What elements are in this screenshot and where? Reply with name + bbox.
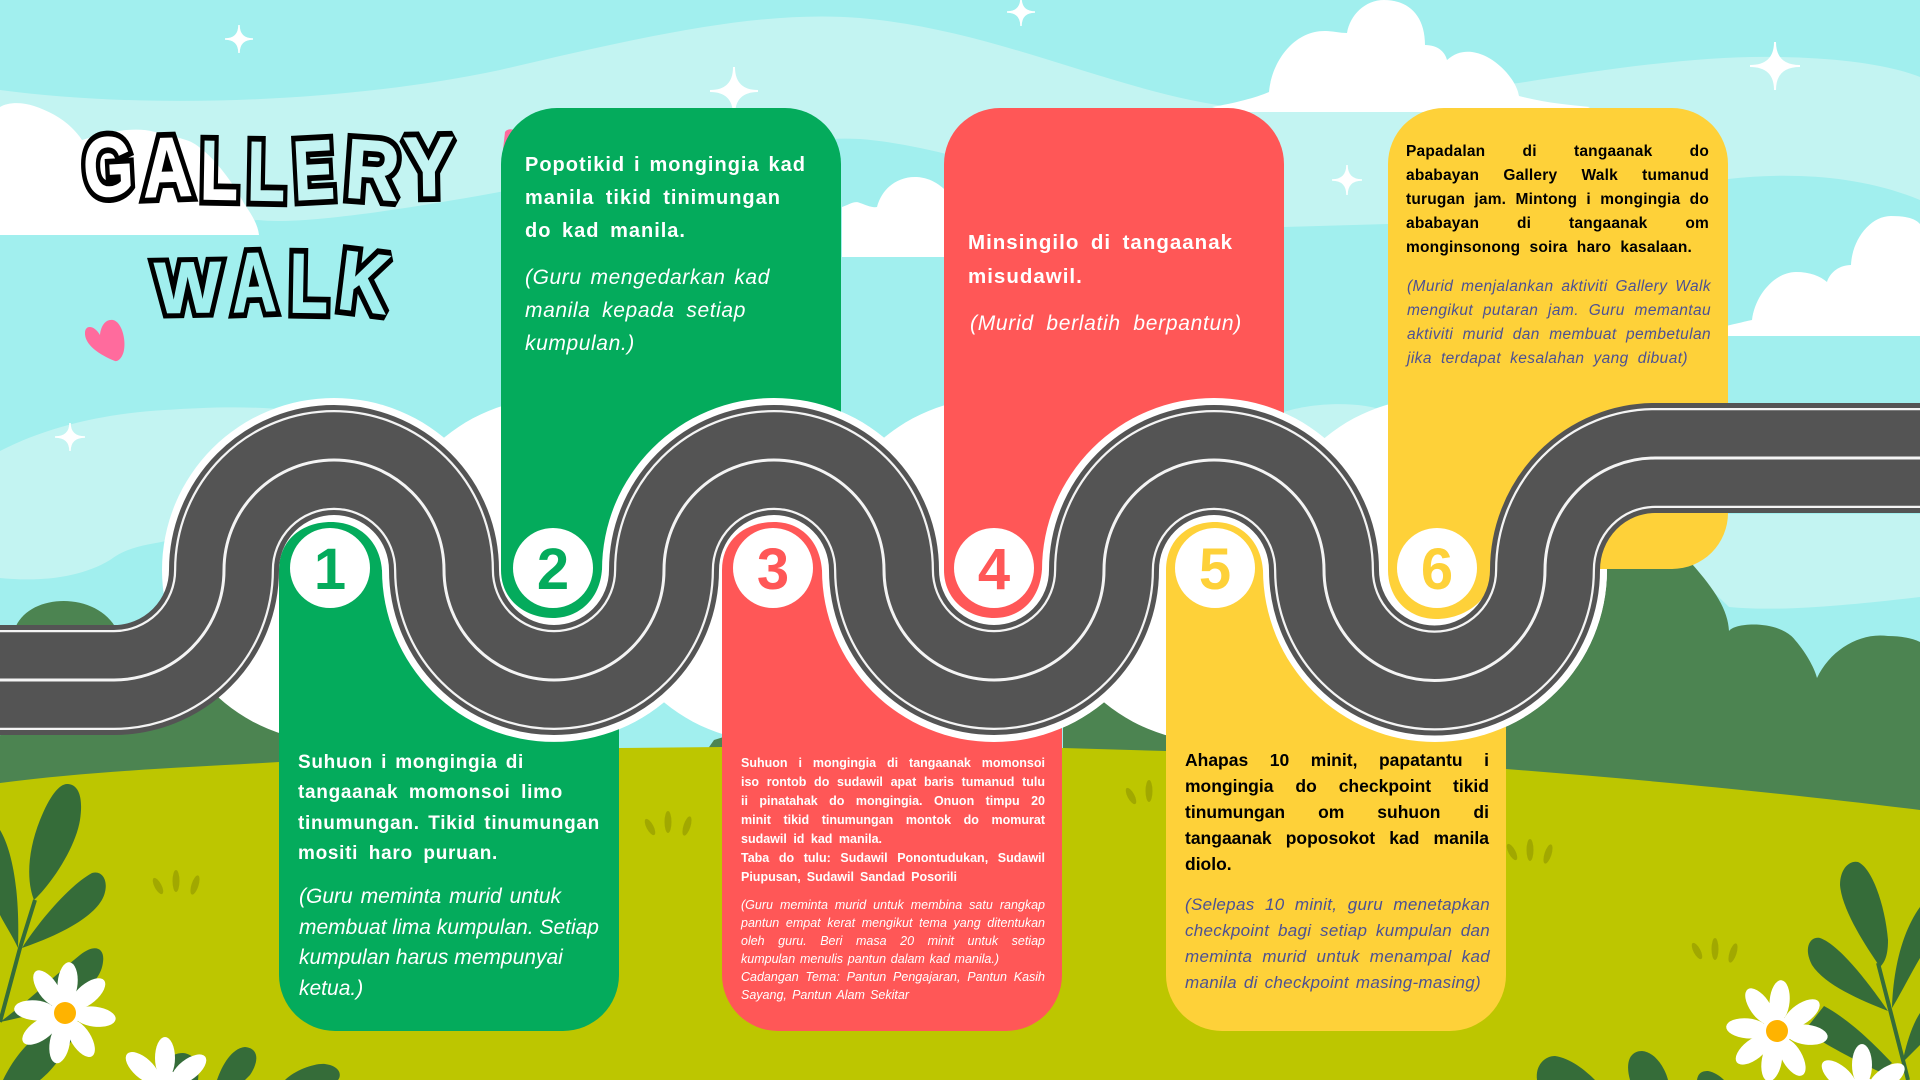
panel 1 main text: mositi haro puruan. [298,843,498,864]
title: Gallery Walk: Y [403,119,455,214]
panel 2 teacher note: kumpulan.) [525,332,635,355]
panel 1 main text: Suhuon i mongingia di [298,752,524,773]
panel 2 teacher note [525,266,770,355]
white cloud bank behind the road [162,398,1607,742]
title: Gallery Walk: E [291,122,336,218]
panel 3 arch lobe [722,522,822,571]
panel 3 main text [741,756,1045,884]
panel 5 teacher note: manila di checkpoint masing-masing) [1185,973,1481,992]
number badge 3 [733,528,813,608]
grass tufts [151,780,1739,964]
panel 1 main text: tinumungan. Tikid tinumungan [298,813,600,834]
title: Gallery Walk: L [200,122,239,218]
foliage: bottom left [0,784,340,1080]
number badge 2: 2 [537,537,569,602]
icon: heart left [85,320,125,361]
clouds [0,0,1920,336]
panel 4 main text: Minsingilo di tangaanak [968,231,1233,254]
title: Gallery Walk: A [230,235,277,330]
panel 5 teacher note: (Selepas 10 minit, guru menetapkan [1185,895,1490,914]
number badge 6 [1397,528,1477,608]
number badge 2 [513,528,593,608]
panel 5 teacher note [1185,895,1490,992]
number badge 4 [954,528,1034,608]
panel 4 main text: misudawil. [968,264,1083,288]
panel 4 main text [968,231,1233,288]
panel 3 teacher note: Sayang, Pantun Alam Sekitar [741,988,909,1002]
panel 6 teacher note: (Murid menjalankan aktiviti Gallery Walk [1407,278,1711,295]
road halo: bend 6 lower [1263,570,1607,742]
panel 2 teacher note: (Guru mengedarkan kad [525,266,770,289]
panel 6 teacher note: aktiviti murid dan membuat pembetulan [1407,326,1711,343]
panel 1 teacher note: membuat lima kumpulan. Setiap [299,916,599,939]
panel 5 yellow [1166,570,1506,1031]
number badge 3: 3 [757,537,789,602]
panel 3 teacher note: pantun empat kerat mengikut tema yang ditentukan [741,916,1045,930]
panel 1 arch lobe [279,522,382,571]
title: Gallery Walk: R [343,121,403,219]
panel 6 main text: monginsonong soira haro kasalaan. [1406,239,1692,256]
panel 2 main text: manila tikid tinimungan [525,187,781,209]
panel 6 main text [1406,143,1709,256]
title: Gallery Walk: W [154,247,222,329]
panel 3 teacher note [740,898,1045,1002]
title: Gallery Walk [81,130,458,320]
panel 6 teacher note: jika terdapat kesalahan yang dibuat) [1407,350,1688,367]
road halo: bend 2 lower [382,570,726,742]
panel 5 teacher note: checkpoint bagi setiap kumpulan dan [1185,921,1490,940]
road halo: bend 4 lower [822,570,1166,742]
panel 3 main text: iso rontob do sudawil apat baris tumanud tulu [741,775,1045,789]
panel 3 main text: minit tikid tinumungan montok do momurat [741,813,1045,827]
number badge 5 [1175,528,1255,608]
panel 5 main text: tinumungan om suhuon di [1185,802,1489,822]
panel 2 main text: do kad manila. [525,220,686,242]
panel 1 main text: tangaanak momonsoi limo [298,782,563,803]
road halo: arch 5 upper [1042,398,1386,570]
panel 2 main text: Popotikid i mongingia kad [525,154,806,176]
panel 3 main text: Piupusan, Sudawil Sandad Posorili [741,870,957,884]
light sky bands [0,17,1920,609]
grass field [0,746,1920,1080]
foliage: bottom right [1537,862,1920,1080]
panel 4 teacher note: (Murid berlatih berpantun) [970,312,1242,335]
panel 2 main text [525,154,806,242]
panel 5 main text: mongingia do checkpoint tikid [1185,776,1489,796]
number badge 1 [290,528,370,608]
panel 3 main text: sudawil id kad manila. [741,832,882,846]
panel 6 main text: Papadalan di tangaanak do [1406,143,1709,160]
title: Gallery Walk: L [247,123,286,219]
panel 4 red [944,108,1284,570]
title: Gallery Walk: G [81,118,136,215]
panel 3 teacher note: oleh guru. Beri masa 20 minit untuk setiap [741,934,1045,948]
road halo: arch 3 upper [602,398,946,570]
panel 3 teacher note: kumpulan menulis pantun dalam kad manila.) [741,952,999,966]
panel 5 main text: Ahapas 10 minit, papatantu i [1185,750,1489,770]
panel 5 main text: tangaanak poposokot kad manila [1185,828,1489,848]
panel 6 teacher note: mengikut putaran jam. Guru memantau [1407,302,1711,319]
panel 6 main text: turugan jam. Mintong i mongingia do [1406,191,1709,208]
flower: bottom right second [1817,1044,1910,1080]
panel 3 teacher note: Cadangan Tema: Pantun Pengajaran, Pantun Kasih [741,970,1045,984]
panel 6 main text: ababayan Gallery Walk tumanud [1406,167,1709,184]
panel 5 main text [1185,750,1490,874]
flower: bottom right [1725,979,1829,1080]
panel 6 teacher note [1405,278,1712,367]
panel 4 bend lobe [944,569,1042,618]
winding road [0,458,1920,681]
panel 2 green [501,108,841,570]
panel 1 teacher note: ketua.) [299,977,363,1000]
panel 2 teacher note: manila kepada setiap [525,299,746,322]
panel 3 main text: ii pinatahak do mongingia. Onuon timpu 20 [741,794,1045,808]
number badge 4: 4 [978,537,1010,602]
icon: heart behind panel 2 [503,129,518,160]
panel 2 bend lobe [501,569,602,618]
panel 3 main text: Suhuon i mongingia di tangaanak momonsoi [741,756,1045,770]
panel 5 teacher note: meminta murid untuk menampal kad [1185,947,1490,966]
panel 1 teacher note: kumpulan harus mempunyai [299,946,563,969]
panel 5 arch lobe [1166,522,1263,571]
flower: bottom left [13,961,117,1065]
number badge 5: 5 [1199,537,1231,602]
panel 6 bend lobe [1388,568,1495,619]
panel 1 green [279,570,619,1031]
panel 1 teacher note: (Guru meminta murid untuk [299,885,561,908]
title: Gallery Walk: K [334,233,395,333]
panel 3 main text: Taba do tulu: Sudawil Ponontudukan, Sudawil [741,851,1045,865]
panel 3 red [722,570,1062,1031]
panel 1 main text [298,752,600,864]
number badge 1: 1 [314,537,346,602]
distant green hills [0,500,1920,830]
number badge 6: 6 [1421,537,1453,602]
title: Gallery Walk: A [141,120,193,216]
flower: bottom left second [120,1037,211,1080]
panel 1 teacher note [299,885,599,1000]
panel 6 yellow [1388,108,1728,570]
title: Gallery Walk: L [289,236,329,331]
panel 6 main text: ababayan di tangaanak om [1406,215,1709,232]
panel 3 teacher note: (Guru meminta murid untuk membina satu rangkap [741,898,1045,912]
sparkles [55,0,1800,451]
panel 5 main text: diolo. [1185,854,1232,874]
